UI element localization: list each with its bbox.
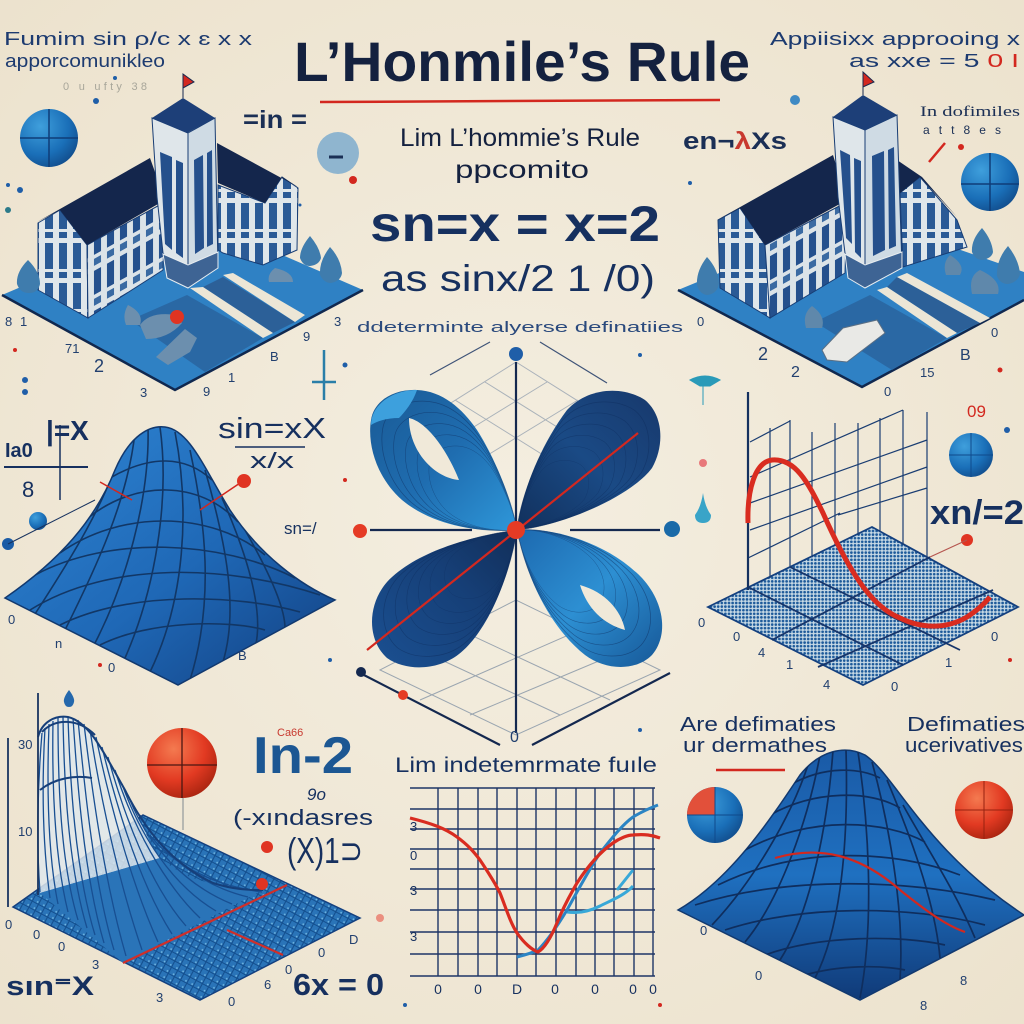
axis numerals scattered: 8	[920, 998, 927, 1013]
right wing roof	[217, 143, 298, 203]
left roof	[717, 155, 847, 245]
road	[815, 295, 947, 370]
central formula block: sn=x = x=2	[370, 196, 660, 252]
label: center-left fraction: sn=/	[284, 519, 317, 538]
marker: red point mid-right	[930, 534, 973, 557]
tower windows	[840, 147, 896, 258]
long wall	[765, 202, 847, 318]
y-axis ticks: 3	[410, 929, 417, 944]
label: ln-2 block	[233, 727, 373, 871]
right wing wall	[900, 177, 967, 267]
axis numerals scattered: 0	[228, 994, 235, 1009]
hole lower-right	[580, 585, 625, 630]
x-axis ticks: 0	[551, 981, 559, 997]
label: fraction mid-left: Ia0	[5, 440, 33, 462]
icon: blue sphere top-left	[20, 109, 78, 167]
faint scribble: 0 u ufty 38	[63, 81, 147, 93]
axis numerals scattered: 1	[20, 314, 27, 329]
label: ln-2 block: (-xındasres	[233, 805, 373, 830]
label: fraction mid-left	[4, 415, 89, 502]
axis numerals scattered: 2	[758, 344, 768, 364]
chart: 3D surface mid-left	[5, 427, 335, 685]
red curve	[410, 818, 660, 952]
floor lines	[748, 557, 993, 667]
axis numerals scattered: 0	[108, 660, 115, 675]
icon: split sphere bottom-right left	[687, 787, 743, 843]
trees	[17, 236, 342, 293]
axis numerals scattered: 30	[18, 737, 32, 752]
tower porch	[845, 252, 902, 288]
top-left note: apporcomunikleo	[5, 51, 165, 71]
white car	[822, 320, 885, 362]
red curve	[775, 853, 965, 932]
arrow: red dash	[716, 769, 785, 771]
axis numerals scattered: 8	[960, 973, 967, 988]
label: 6x = 0: 6x = 0	[293, 967, 384, 1002]
top-right note: as xxe = 5 0 I	[849, 51, 1019, 71]
x-axis ticks	[434, 981, 657, 997]
label: xn/2: xn/=2	[930, 494, 1024, 532]
text: definitions far-right: Defimaties	[907, 714, 1024, 736]
flag	[863, 72, 874, 95]
axis numerals scattered: 8	[5, 314, 12, 329]
text: definitions center-right: Are defimaties	[680, 714, 836, 736]
illustration: campus building right	[678, 72, 1024, 387]
ribbon striations	[382, 401, 651, 656]
axis numerals scattered: B	[238, 648, 247, 663]
marker: red point with leader	[100, 474, 251, 510]
axis numerals scattered: 0	[5, 917, 12, 932]
y-axis ticks: 3	[410, 883, 417, 898]
y-axis ticks: 3	[410, 819, 417, 834]
hole upper-left	[409, 418, 459, 480]
label: ln-2 block: 9o	[307, 785, 326, 804]
text: definitions far-right: ucerivatives	[905, 735, 1023, 757]
central formula block: Lim L’hommie’s Rule	[400, 124, 640, 152]
ribbon cap highlight	[371, 390, 417, 425]
tower windows	[160, 150, 213, 258]
axis numerals scattered: 0	[697, 314, 704, 329]
top-left note: Fumim sin ρ/c x ɛ x x	[4, 29, 252, 49]
lobe lower-right	[517, 530, 662, 667]
surface marker	[256, 878, 268, 890]
ground edge	[2, 290, 363, 390]
axis nodes	[509, 347, 523, 361]
lobe upper-left	[370, 390, 517, 531]
label: ln-2 block: In-2	[253, 727, 353, 785]
accent: red tick top-right	[929, 143, 945, 162]
axis numerals scattered: 3	[140, 385, 147, 400]
chart: 3D red curve with grid mid-right	[708, 392, 1018, 685]
lobe upper-right	[517, 391, 660, 530]
axis numerals scattered: 0	[285, 962, 292, 977]
ground	[2, 215, 363, 390]
blue curve	[517, 805, 658, 957]
x-axis ticks: 0	[474, 981, 482, 997]
label: sin x over x: sin=xX	[218, 413, 326, 445]
axis numerals scattered: 0	[8, 612, 15, 627]
flag	[183, 74, 194, 98]
axis numerals scattered: D	[349, 932, 358, 947]
tower faces	[833, 117, 865, 287]
axis numerals scattered: 0	[991, 325, 998, 340]
axis numerals scattered: B	[960, 347, 971, 364]
label: sin x over x	[218, 413, 326, 473]
label: sin x bottom: sın⁼X	[6, 971, 94, 1001]
tower faces	[152, 118, 188, 287]
marker: red point bottom-left	[261, 841, 273, 853]
axis numerals scattered: 15	[920, 365, 934, 380]
label: ln-2 block: (X)1⊃	[287, 830, 363, 871]
axis numerals scattered: 0	[700, 923, 707, 938]
axis numerals scattered: 0	[891, 679, 898, 694]
lobe lower-left	[372, 530, 517, 667]
central formula block	[357, 124, 683, 336]
central formula block: ddeterminte alyerse definatiies	[357, 319, 683, 336]
x-axis ticks: D	[512, 981, 522, 997]
label: ln-2 block: Ca66	[277, 727, 303, 739]
axes	[360, 362, 670, 745]
ground edge	[678, 290, 1024, 387]
top-right note: Appiisixx approoing x	[770, 29, 1020, 49]
axis numerals scattered: 0	[510, 729, 519, 746]
axis numerals scattered: 1	[786, 657, 793, 672]
surface contour arcs	[38, 717, 263, 890]
label: fraction mid-left: |=X	[46, 415, 89, 446]
center point	[507, 521, 525, 539]
accent: teal axis mark left	[312, 350, 336, 400]
axis numerals scattered: 0	[33, 927, 40, 942]
text: definitions far-right	[905, 714, 1024, 757]
icon: blue sphere top-right	[961, 153, 1019, 211]
surface lower sheet	[40, 858, 263, 963]
accent: teal mark right	[690, 376, 720, 405]
axis numerals scattered: n	[55, 636, 62, 651]
axis numerals scattered: 0	[991, 629, 998, 644]
axis numerals scattered: 0	[733, 629, 740, 644]
top-left note	[4, 29, 252, 71]
illustration: campus building left	[2, 74, 363, 390]
axis numerals scattered: 4	[758, 645, 765, 660]
y-axis ticks	[410, 819, 417, 944]
small labels near top: a t t 8 e s	[923, 123, 1001, 137]
right wing roof	[897, 160, 957, 217]
floor	[708, 527, 1018, 685]
floor	[13, 815, 360, 1000]
axis numerals scattered: 10	[18, 824, 32, 839]
back wall grid	[748, 410, 927, 578]
accent: teal drop mid-right	[695, 493, 711, 523]
axis numerals scattered: 0	[755, 968, 762, 983]
axis numerals scattered: 0	[58, 939, 65, 954]
axis numerals scattered	[5, 314, 998, 1013]
trees	[697, 228, 1020, 295]
axis numerals scattered: 0	[318, 945, 325, 960]
axis numerals scattered: 0	[884, 384, 891, 399]
chart: 3D surface bottom-right	[678, 750, 1024, 1000]
marker: blue point with leader	[2, 500, 95, 550]
axis numerals scattered: 1	[945, 655, 952, 670]
icon: red sphere bottom-right right	[955, 781, 1013, 839]
small labels near top: In dofimiles	[920, 104, 1020, 120]
label: fraction mid-left: 8	[22, 477, 34, 502]
long wall	[87, 202, 165, 318]
axis numerals scattered: 0	[698, 615, 705, 630]
axis numerals scattered: 9	[303, 329, 310, 344]
ribbon lobes	[370, 390, 662, 667]
surface upper sheet	[38, 717, 160, 893]
title underline	[320, 100, 720, 102]
axis numerals scattered: B	[270, 349, 279, 364]
small labels near top: en¬ λXs	[683, 128, 787, 155]
x-axis ticks: 0	[434, 981, 442, 997]
light blue curve	[567, 870, 633, 913]
tower roof	[152, 98, 215, 133]
gable wall	[38, 210, 88, 318]
small labels near top	[243, 104, 1020, 155]
chart: bottom center line graph	[410, 788, 660, 997]
right wing wall	[218, 177, 298, 265]
x-axis ticks: 0	[591, 981, 599, 997]
shrubs	[805, 255, 999, 328]
bottom grid	[380, 600, 660, 735]
rocks and shrubs	[124, 268, 293, 365]
axis numerals scattered: 1	[228, 370, 235, 385]
x-axis ticks: 0	[629, 981, 637, 997]
tower porch	[163, 252, 218, 288]
gable wall	[718, 208, 770, 318]
text: definitions center-right	[680, 714, 836, 757]
icon: red sphere bottom-left	[147, 728, 217, 830]
axis numerals scattered: 3	[334, 314, 341, 329]
small labels near top: =in =	[243, 106, 307, 134]
x-axis ticks: 0	[649, 981, 657, 997]
axis numerals scattered: 09	[967, 402, 986, 421]
axis numerals scattered: 4	[823, 677, 830, 692]
axis numerals scattered: 3	[92, 957, 99, 972]
axis numerals scattered: 6	[264, 977, 271, 992]
axis numerals scattered: 2	[791, 364, 800, 381]
text: definitions center-right: ur dermathes	[683, 735, 827, 757]
axis numerals scattered: 2	[94, 356, 104, 376]
road	[130, 295, 263, 372]
chart: central lobed ribbon	[353, 342, 680, 745]
tower roof	[833, 95, 897, 130]
top grid	[430, 342, 607, 383]
top-right note	[770, 29, 1020, 71]
grid	[410, 788, 655, 976]
icon: blue sphere mid-right	[949, 433, 993, 477]
left roof	[37, 158, 165, 245]
axis numerals scattered: 71	[65, 341, 79, 356]
red point	[170, 310, 184, 324]
axis numerals scattered: 9	[203, 384, 210, 399]
label: sin x over x: x/x	[250, 448, 294, 473]
axis numerals scattered: 3	[156, 990, 163, 1005]
red diagonal	[367, 433, 638, 650]
chart heading: bottom center: Lim indetemrmate fuıle	[395, 754, 657, 777]
central formula block: ppcomito	[455, 156, 589, 184]
title: L’Honmile’s Rule	[294, 30, 750, 93]
red diagonal	[123, 885, 287, 963]
chart: 3D surface bottom-left	[8, 693, 360, 1000]
axis	[747, 392, 749, 590]
accent: blue drop bottom-left	[64, 690, 74, 707]
central formula block: as sinx/2 1 /0)	[381, 258, 655, 299]
icon: grey sphere top-center	[317, 132, 359, 174]
axis	[8, 693, 38, 907]
ground	[678, 215, 1024, 387]
surface strands	[38, 717, 262, 956]
red curve	[748, 460, 990, 626]
y-axis ticks: 0	[410, 848, 417, 863]
